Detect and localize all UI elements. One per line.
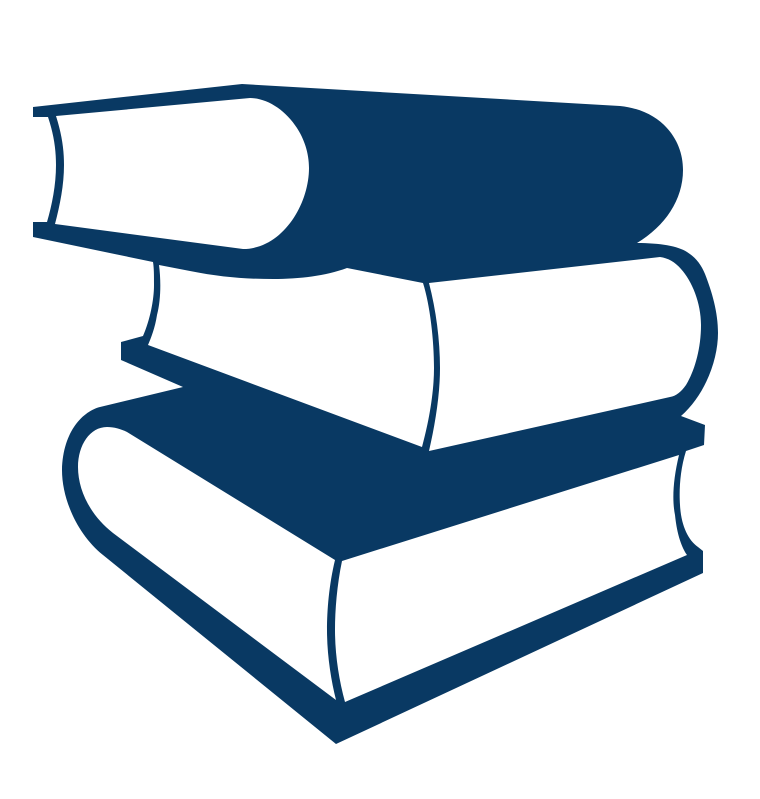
dark silhouette of the book stack xyxy=(33,84,718,744)
middle book: right pages xyxy=(429,257,701,451)
bottom book: left pages xyxy=(78,427,336,700)
top book: pages xyxy=(55,98,309,249)
middle book: left pages xyxy=(148,265,434,447)
bottom book: right pages xyxy=(335,455,687,702)
